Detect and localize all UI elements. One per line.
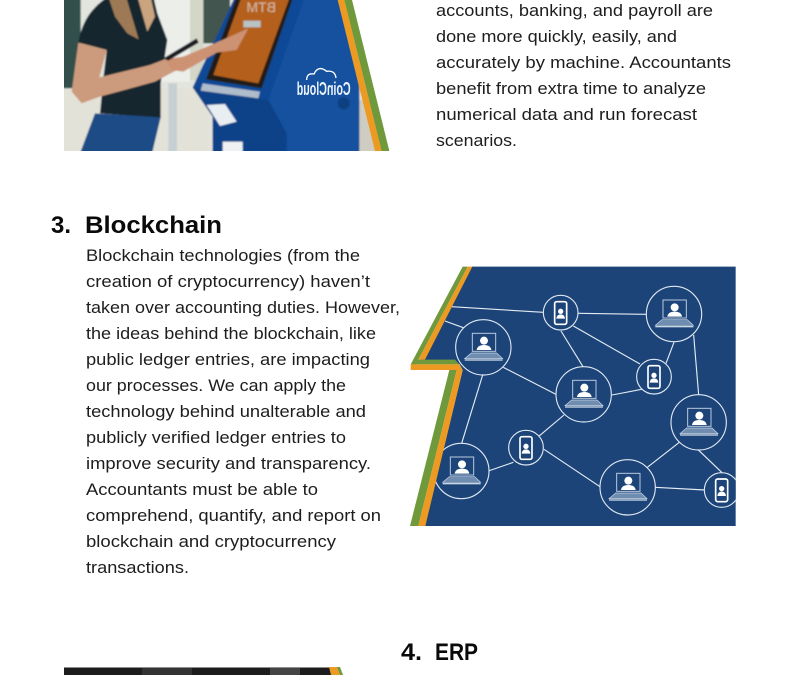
text block: blockchain paragraph: comprehend, quantify, and report on [86,506,381,525]
text block: blockchain paragraph: the ideas behind the blockchain, like [86,324,376,343]
text block: blockchain paragraph: taken over accounting duties. However, [86,298,400,317]
photo background [60,0,393,155]
text block: blockchain paragraph: our processes. We can apply the [86,376,346,395]
woman [72,0,248,155]
heading: 4. ERP: 4. [401,639,422,666]
mirrored CoinCloud logo [297,68,350,95]
ATM kiosk [193,0,359,155]
text block: automation paragraph: done more quickly, easily, and [436,27,677,46]
photo stripes [338,0,389,151]
text block: automation paragraph: accurately by machine. Accountants [436,53,731,72]
blue panel [420,267,736,526]
text block: blockchain paragraph: blockchain and cryptocurrency [86,532,337,551]
text block: blockchain paragraph [86,246,400,577]
network nodes [434,286,739,515]
photo: woman using a Bitcoin ATM [60,0,393,155]
text block: automation paragraph [436,1,731,150]
network diagram image [410,267,739,526]
text block: blockchain paragraph: public ledger entries, are impacting [86,350,370,369]
text block: automation paragraph: accounts, banking, and payroll are [436,1,713,20]
heading: 3. Blockchain: Blockchain [85,212,222,239]
text block: automation paragraph: numerical data and run forecast [436,105,697,124]
text block: automation paragraph: scenarios. [436,131,517,150]
photo: next section image top edge [64,667,343,675]
heading: 4. ERP [401,639,478,666]
text block: blockchain paragraph: Blockchain technologies (from the [86,246,360,265]
text block: blockchain paragraph: transactions. [86,558,189,577]
heading: 4. ERP: ERP [435,639,478,666]
network links [445,307,722,490]
text block: blockchain paragraph: publicly verified ledger entries to [86,428,346,447]
mirrored CoinCloud logo: CoinCloud [297,78,351,99]
text block: blockchain paragraph: improve security and transparency. [86,454,371,473]
text block: blockchain paragraph: Accountants must be able to [86,480,318,499]
text block: automation paragraph: benefit from extra time to analyze [436,79,706,98]
stripes [410,267,472,526]
text block: blockchain paragraph: technology behind unalterable and [86,402,366,421]
heading: 3. Blockchain: 3. [51,212,71,239]
text block: blockchain paragraph: creation of cryptocurrency) haven’t [86,272,370,291]
